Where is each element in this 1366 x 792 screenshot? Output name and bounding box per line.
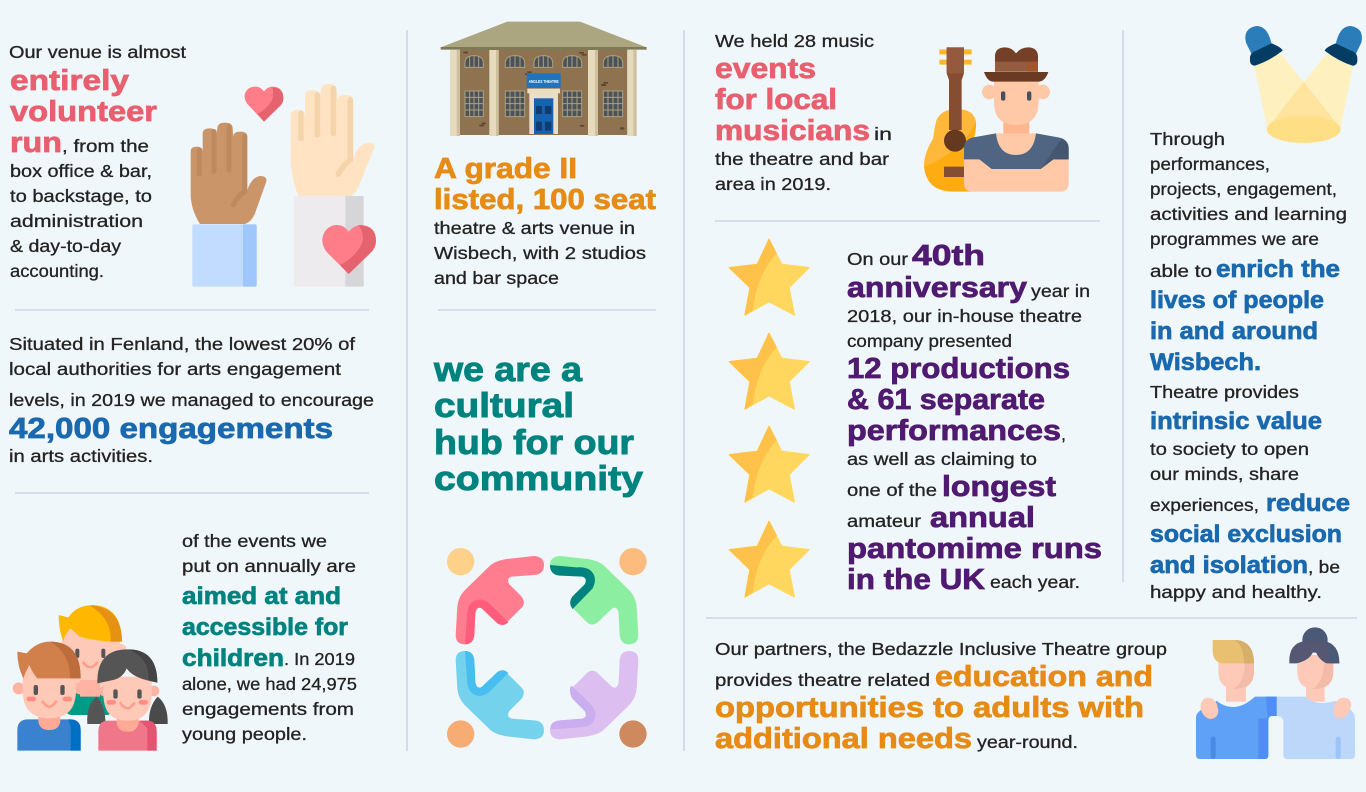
text block: 40th anniversary: amateur [847, 511, 921, 531]
text block: volunteer run: Our venue is almost [9, 42, 186, 62]
text block: volunteer run: run [10, 127, 62, 159]
text block: grade II listed venue: listed, 100 seat [434, 184, 657, 216]
text block: grade II listed venue: and bar space [434, 268, 559, 288]
text block: Bedazzle partners: Our partners, the Bedazzle Inclusive Theatre group [715, 639, 1167, 659]
icon: musician with guitar [924, 47, 1069, 192]
text block: enrich lives: to society to open [1150, 439, 1309, 459]
star 2 [729, 333, 809, 409]
text block: enrich lives: our minds, share [1150, 464, 1299, 484]
text block: 40th anniversary: 12 productions [847, 353, 1070, 385]
star 3 [729, 426, 809, 502]
text block: children events: young people. [182, 724, 307, 744]
text block: children events [182, 531, 357, 744]
text block: enrich lives: experiences, [1150, 495, 1259, 515]
text block: enrich lives: , be [1308, 557, 1340, 577]
text block: volunteer run: administration [10, 211, 143, 231]
text block: grade II listed venue: theatre & arts venue in [434, 218, 635, 238]
text block: 40th anniversary: as well as claiming to [847, 449, 1037, 469]
icon: theatre building: ANGLES THEATRE [529, 79, 559, 84]
text block: 40th anniversary: 2018, our in-house theatre [847, 306, 1082, 326]
text block: enrich lives: intrinsic value [1150, 408, 1322, 435]
text block: volunteer run: to backstage, to [10, 186, 152, 206]
text block: music events: in [874, 124, 892, 144]
text block: 40th anniversary: On our [847, 249, 908, 269]
text block: volunteer run: volunteer [10, 96, 157, 128]
text block: music events: events [715, 53, 816, 85]
text block: enrich lives: programmes we are [1150, 229, 1319, 249]
text block: 42,000 engagements: 42,000 engagements [9, 413, 333, 445]
text block: Bedazzle partners [715, 639, 1167, 755]
icon: community circle of people [447, 548, 647, 748]
text block: children events: of the events we [182, 531, 327, 551]
stars [729, 239, 809, 597]
text block: Bedazzle partners: year-round. [977, 732, 1078, 752]
text block: 42,000 engagements: in arts activities. [9, 446, 153, 466]
text block: grade II listed venue: A grade II [434, 153, 577, 185]
text block: grade II listed venue: Wisbech, with 2 studios [434, 243, 646, 263]
text block: Bedazzle partners: provides theatre related [715, 670, 930, 690]
icon: raised hands with hearts [191, 84, 376, 287]
text block: 40th anniversary: , [1061, 424, 1066, 444]
star 1 [729, 239, 809, 315]
star 4 [729, 521, 809, 597]
icon: three children [13, 605, 168, 751]
text block: volunteer run [9, 42, 186, 281]
text block: enrich lives: performances, [1150, 154, 1270, 174]
text block: enrich lives: Theatre provides [1150, 382, 1299, 402]
text block: children events: put on annually are [182, 556, 356, 576]
heading: we are a cultural hub: community [434, 460, 643, 498]
text block: enrich lives: and isolation [1150, 552, 1308, 579]
icon: spotlights [1245, 26, 1362, 143]
text block: grade II listed venue [434, 153, 657, 288]
text block: 40th anniversary: in the UK [847, 564, 985, 596]
text block: 40th anniversary: performances [847, 415, 1061, 447]
text block: enrich lives: lives of people [1150, 287, 1324, 314]
text block: children events: . In 2019 [284, 649, 355, 669]
icon: two friends [1196, 627, 1355, 759]
text block: 40th anniversary: longest [942, 471, 1057, 503]
text block: music events: for local [715, 84, 837, 116]
text block: children events: aimed at and [182, 583, 341, 610]
text block: music events: We held 28 music [715, 31, 874, 51]
text block: 40th anniversary: pantomime runs [847, 533, 1102, 565]
text block: enrich lives: enrich the [1216, 256, 1340, 283]
text block: volunteer run: & day-to-day [10, 236, 121, 256]
text block: enrich lives: Wisbech. [1150, 349, 1261, 376]
text block: 40th anniversary: 40th [912, 240, 985, 272]
text block: Bedazzle partners: additional needs [715, 723, 972, 755]
text block: enrich lives: in and around [1150, 318, 1318, 345]
text block: 42,000 engagements: local authorities for arts engagement [9, 359, 341, 379]
text block: enrich lives: projects, engagement, [1150, 179, 1337, 199]
text block: enrich lives: social exclusion [1150, 521, 1342, 548]
text block: music events: musicians [715, 115, 870, 147]
text block: music events: the theatre and bar [715, 149, 889, 169]
text block: enrich lives: able to [1150, 261, 1212, 281]
text block: 40th anniversary [847, 240, 1102, 596]
text block: enrich lives: activities and learning [1150, 204, 1347, 224]
text block: 40th anniversary: company presented [847, 331, 1012, 351]
text block: music events [715, 31, 892, 194]
heading: we are a cultural hub: hub for our [434, 424, 634, 462]
text block: children events: engagements from [182, 699, 354, 719]
text block: enrich lives: reduce [1266, 490, 1350, 517]
text block: 42,000 engagements [9, 334, 374, 466]
text block: children events: children [182, 645, 284, 672]
text block: children events: accessible for [182, 614, 348, 641]
text block: enrich lives: Through [1150, 129, 1225, 149]
text block: 40th anniversary: each year. [990, 572, 1080, 592]
heading: we are a cultural hub: cultural [434, 387, 574, 425]
text block: volunteer run: box office & bar, [10, 161, 152, 181]
text block: 42,000 engagements: Situated in Fenland, the lowest 20% of [9, 334, 355, 354]
icon: theatre building [441, 22, 647, 136]
text block: 40th anniversary: one of the [847, 480, 937, 500]
text block: Bedazzle partners: education and [935, 661, 1153, 693]
text block: Bedazzle partners: opportunities to adults with [715, 692, 1144, 724]
text block: 40th anniversary: annual [930, 502, 1035, 534]
text block: volunteer run: entirely [10, 65, 129, 97]
heading: we are a cultural hub [433, 351, 643, 498]
text block: enrich lives [1150, 129, 1350, 602]
text block: 40th anniversary: anniversary [847, 272, 1027, 304]
text block: 40th anniversary: year in [1031, 281, 1090, 301]
text block: volunteer run: accounting. [10, 261, 104, 281]
text block: music events: area in 2019. [715, 174, 831, 194]
text block: children events: alone, we had 24,975 [182, 674, 357, 694]
text block: volunteer run: , from the [62, 136, 149, 156]
text block: 42,000 engagements: levels, in 2019 we managed to encourage [9, 390, 374, 410]
text block: enrich lives: happy and healthy. [1150, 582, 1322, 602]
text block: 40th anniversary: & 61 separate [847, 384, 1045, 416]
heading: we are a cultural hub: we are a [433, 351, 583, 389]
